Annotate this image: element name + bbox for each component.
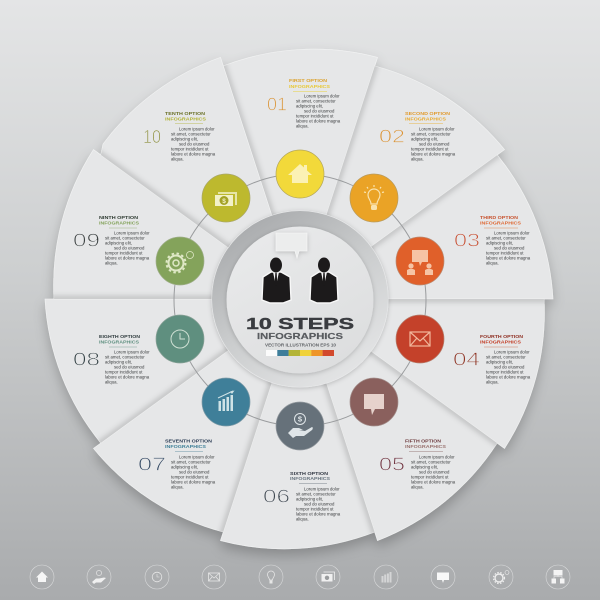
panel: seventh option: aliqua. [171, 484, 184, 490]
footer icon: bar chart [374, 565, 398, 589]
step 3 badge: people with speech bubble [396, 237, 444, 285]
panel: first option: sed do eiusmod [304, 108, 335, 114]
panel: sixth option: 06 [263, 486, 290, 506]
footer icon: home [30, 565, 54, 589]
panel: ninth option: INFOGRAPHICS [99, 220, 139, 226]
panel: seventh option: sed do eiusmod [179, 470, 210, 474]
panel: sixth option: SIXTH OPTION [290, 471, 328, 476]
panel: eighth option: aliqua. [105, 380, 118, 384]
panel: first option: tempor incididunt ut [296, 114, 334, 118]
hub subtitle: INFOGRAPHICS [257, 331, 343, 341]
panel: first option: aliqua. [296, 124, 309, 128]
panel: fourth option: sit amet, consectetur [486, 354, 526, 360]
panel: seventh option: labore et dolore magna [171, 480, 216, 484]
panel: ninth option: aliqua. [105, 260, 118, 266]
step 10 badge: banknotes: $ [222, 198, 226, 205]
panel: eighth option: adipiscing elit, [105, 360, 132, 364]
panel: tenth option: Lorem ipsum dolor [179, 126, 215, 132]
icon: left businessman [262, 258, 291, 303]
panel: fifth option: aliqua. [411, 484, 424, 490]
panel: seventh option [92, 350, 272, 540]
panel: seventh option: Lorem ipsum dolor [179, 454, 215, 460]
step 7 badge: bar chart [202, 378, 250, 426]
panel: first option: FIRST OPTION [289, 78, 327, 83]
panel: eighth option: 08 [73, 350, 100, 370]
panel: tenth option: labore et dolore magna [171, 152, 216, 156]
panel: fourth option: FOURTH OPTION [480, 334, 523, 339]
panel: second option: 02 [379, 126, 405, 146]
panel: third option [372, 155, 558, 310]
panel: sixth option: labore et dolore magna [296, 512, 341, 516]
step 6 badge: hand with dollar [276, 402, 324, 450]
footer icon: envelope [202, 565, 226, 589]
footer icon: org chart [546, 565, 570, 589]
panel: first option: sit amet, consectetur [296, 98, 336, 104]
step 4 badge: envelope [396, 315, 444, 363]
panel: ninth option: labore et dolore magna [105, 256, 150, 260]
panel: eighth option: sit amet, consectetur [105, 354, 145, 360]
panel: tenth option [98, 57, 272, 248]
panel: fourth option: labore et dolore magna [486, 374, 531, 380]
panel: ninth option: 09 [73, 230, 100, 250]
step 9 badge: gears [156, 237, 204, 285]
panel: second option: tempor incididunt ut [411, 146, 449, 152]
bottom icon row [30, 565, 570, 589]
panel: seventh option: sit amet, consectetur [171, 460, 211, 464]
panel: fourth option: tempor incididunt ut [486, 370, 524, 374]
panel: second option: labore et dolore magna [411, 152, 456, 156]
panel: ninth option [48, 149, 228, 299]
panel: third option: adipiscing elit, [486, 240, 513, 246]
panel: fifth option: sed do eiusmod [419, 470, 450, 474]
panel: tenth option: adipiscing elit, [171, 136, 198, 142]
panel: second option: sed do eiusmod [419, 142, 450, 146]
panel: fifth option: FIFTH OPTION [405, 438, 441, 444]
footer icon: gears [489, 565, 513, 589]
panel: third option: Lorem ipsum dolor [494, 230, 530, 236]
step 6 badge: hand with dollar: $ [298, 415, 303, 424]
panel: sixth option: aliqua. [296, 516, 309, 522]
panel: fifth option: tempor incididunt ut [411, 474, 449, 480]
panel: first option [224, 49, 380, 214]
panel: sixth option: INFOGRAPHICS [290, 476, 330, 481]
panel: tenth option: sed do eiusmod [179, 142, 210, 146]
panel: sixth option: tempor incididunt ut [296, 506, 334, 512]
panel: first option: INFOGRAPHICS [289, 84, 330, 89]
panel: ninth option: sit amet, consectetur [105, 236, 145, 240]
panel: sixth option: sed do eiusmod [304, 502, 335, 506]
panel: third option: labore et dolore magna [486, 256, 531, 260]
panel: eighth option: sed do eiusmod [114, 364, 145, 370]
panel: fifth option: sit amet, consectetur [411, 460, 451, 464]
panel: sixth option: Lorem ipsum dolor [304, 486, 340, 492]
panel: tenth option: 10 [143, 127, 161, 147]
colour strip [266, 350, 334, 356]
speech bubble [276, 233, 307, 258]
panel: third option: THIRD OPTION [480, 215, 518, 220]
icon: right businessman [310, 258, 338, 303]
panel: third option: aliqua. [486, 260, 499, 266]
panel: fifth option: 05 [379, 454, 405, 474]
panel: seventh option: adipiscing elit, [171, 464, 198, 470]
panel: fourth option: sed do eiusmod [494, 364, 525, 370]
panel: fourth option: 04 [453, 350, 480, 370]
panel: seventh option: INFOGRAPHICS [165, 444, 206, 449]
footer icon: chat bubble [431, 565, 455, 589]
panel: seventh option: SEVENTH OPTION [165, 438, 212, 444]
panel: fifth option: Lorem ipsum dolor [419, 454, 455, 460]
panel: second option [326, 66, 507, 246]
step 10 badge: banknotes [202, 174, 250, 222]
panel: ninth option: Lorem ipsum dolor [114, 230, 150, 236]
panel: fifth option [326, 352, 499, 548]
panel: ninth option: NINTH OPTION [99, 215, 138, 220]
panel: sixth option: sit amet, consectetur [296, 492, 336, 496]
panel: fifth option: adipiscing elit, [411, 464, 438, 470]
panel: fourth option: INFOGRAPHICS [480, 340, 521, 344]
panel: first option: 01 [267, 94, 287, 114]
panel: eighth option: tempor incididunt ut [105, 370, 143, 374]
panel: first option: Lorem ipsum dolor [304, 94, 340, 98]
panel: third option: INFOGRAPHICS [480, 220, 521, 226]
hub title: 10 STEPS [246, 316, 354, 333]
panel: third option: tempor incididunt ut [486, 250, 524, 256]
panel: third option: 03 [454, 230, 480, 250]
panel: fourth option: aliqua. [486, 380, 499, 384]
panel: ninth option: adipiscing elit, [105, 240, 132, 246]
panel: tenth option: tempor incididunt ut [171, 146, 209, 152]
step 5 badge: chat bubble [350, 378, 398, 426]
panel: sixth option: adipiscing elit, [296, 496, 323, 502]
footer icon: banknote [316, 565, 340, 589]
panel: tenth option: aliqua. [171, 156, 184, 162]
panel: sixth option [218, 383, 376, 560]
panel: tenth option: sit amet, consectetur [171, 132, 211, 136]
panel: ninth option: tempor incididunt ut [105, 250, 143, 256]
panel: second option: adipiscing elit, [411, 136, 438, 142]
footer icon: hand with dollar [87, 565, 111, 589]
panel: fourth option: Lorem ipsum dolor [494, 350, 530, 354]
panel: tenth option: TENTH OPTION [165, 111, 205, 116]
step 2 badge: light bulb [350, 174, 398, 222]
step 1 badge: home [276, 150, 324, 198]
panel: second option: aliqua. [411, 156, 424, 162]
panel: second option: sit amet, consectetur [411, 132, 451, 136]
panel: eighth option [40, 298, 228, 447]
panel: third option: sed do eiusmod [494, 246, 525, 250]
panel: eighth option: EIGHTH OPTION [99, 334, 140, 339]
panel: seventh option: tempor incididunt ut [171, 474, 209, 480]
panel: second option: Lorem ipsum dolor [419, 126, 455, 132]
panel: fifth option: labore et dolore magna [411, 480, 456, 484]
panel: ninth option: sed do eiusmod [114, 246, 145, 250]
panel: first option: adipiscing elit, [296, 104, 323, 108]
panel: fourth option [372, 299, 550, 456]
central hub [212, 210, 388, 388]
panel: eighth option: Lorem ipsum dolor [114, 350, 150, 354]
panel: second option: INFOGRAPHICS [405, 116, 446, 122]
panel: eighth option: INFOGRAPHICS [99, 340, 139, 344]
panel: second option: SECOND OPTION [405, 111, 450, 116]
hub caption: VECTOR ILLUSTRATION EPS 10 [265, 343, 337, 348]
panel: fourth option: adipiscing elit, [486, 360, 513, 364]
panel: third option: sit amet, consectetur [486, 236, 526, 240]
panel: fifth option: INFOGRAPHICS [405, 444, 446, 449]
step 8 badge: clock [156, 315, 204, 363]
panel: first option: labore et dolore magna [296, 118, 341, 124]
panel: eighth option: labore et dolore magna [105, 374, 150, 380]
footer icon: light bulb [259, 565, 283, 589]
panel: tenth option: INFOGRAPHICS [165, 116, 206, 122]
panel: seventh option: 07 [138, 454, 166, 474]
wheel of ten option panels [45, 49, 553, 549]
footer icon: clock [145, 565, 169, 589]
connecting ring [174, 174, 426, 426]
